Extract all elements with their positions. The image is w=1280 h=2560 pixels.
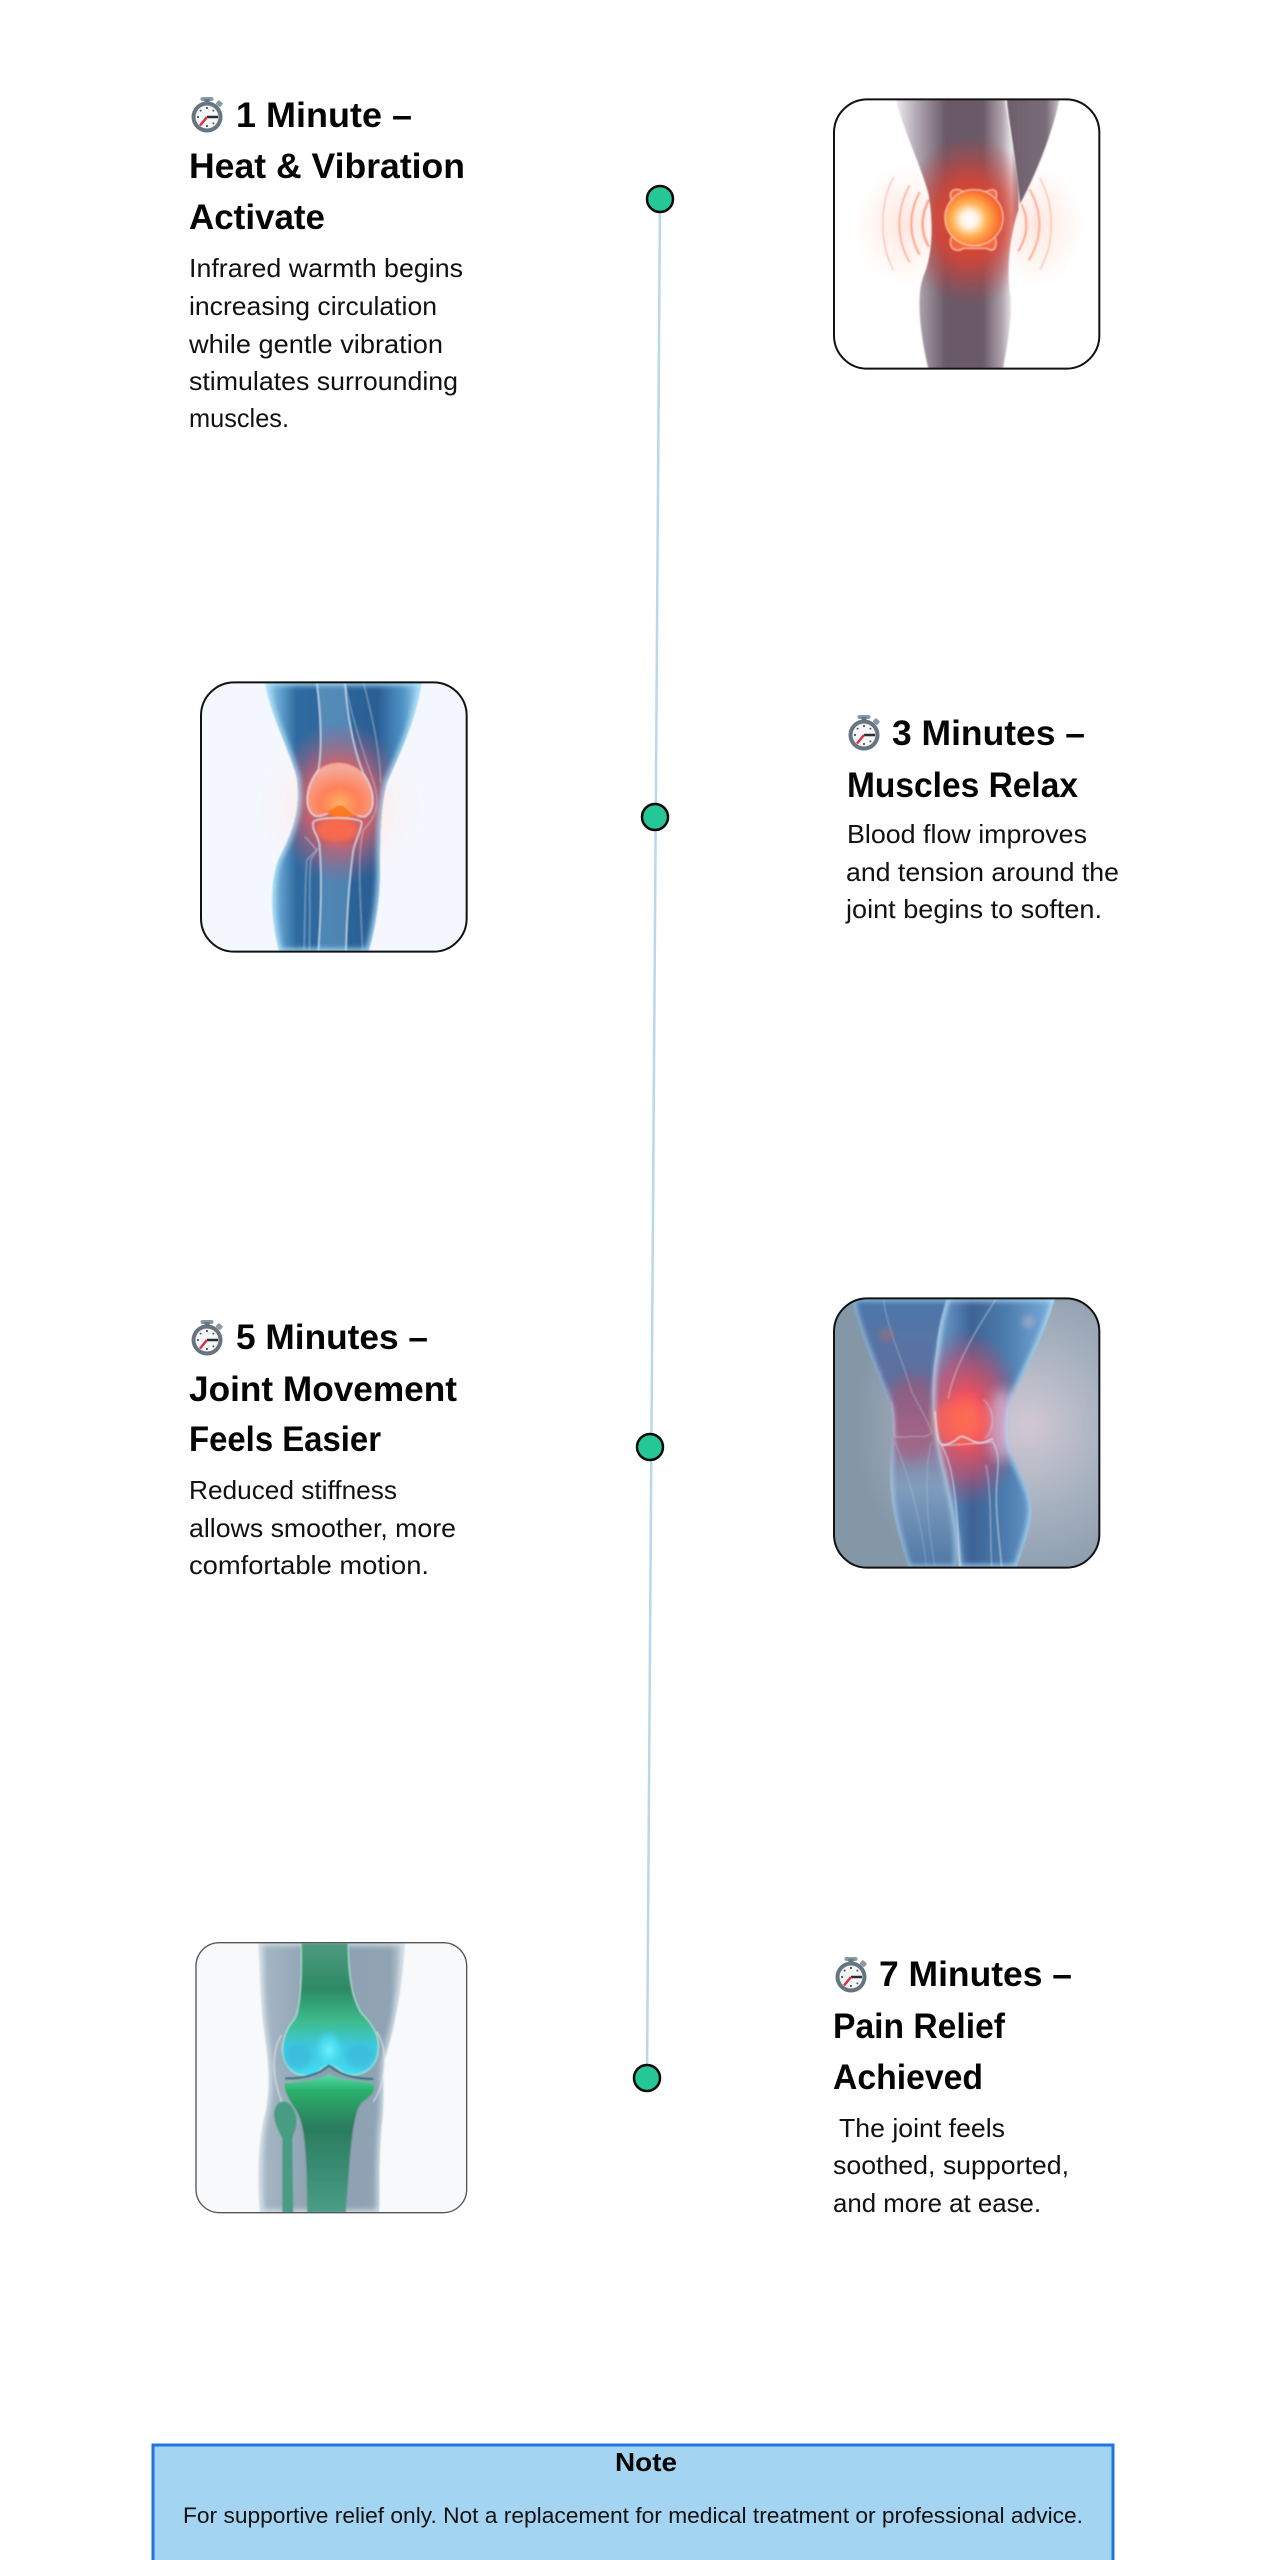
- body text: [845, 819, 1119, 924]
- note text: For supportive relief only. Not a replacement for medical treatment or professional advice.: [183, 2503, 1083, 2528]
- note heading: Note: [615, 2447, 677, 2477]
- body text: [189, 1475, 456, 1580]
- body text: Reduced stiffness: [189, 1475, 397, 1505]
- step 3: knee image with two legs: [834, 1298, 1099, 1568]
- heading: 1 Minute: Heat & Vibration: [189, 147, 465, 186]
- icon: stopwatch: [192, 97, 223, 132]
- heading: 7 Minutes: 7 Minutes –: [879, 1955, 1072, 1994]
- icon: stopwatch: [848, 715, 880, 750]
- body text: [188, 253, 463, 433]
- marker dot 2: [642, 804, 668, 830]
- heading: 3 Minutes: 3 Minutes –: [892, 714, 1085, 753]
- body text: soothed, supported,: [833, 2150, 1069, 2180]
- body text: joint begins to soften.: [845, 894, 1102, 924]
- heading: 5 Minutes: Feels Easier: [189, 1420, 381, 1459]
- marker dot 3: [637, 1434, 663, 1460]
- note panel: [153, 2445, 1113, 2560]
- step 2: knee image with blue leg: [201, 682, 467, 952]
- heading: 5 Minutes: 5 Minutes –: [236, 1318, 428, 1357]
- timeline line: [647, 199, 660, 2078]
- step 4: text block: [833, 1955, 1072, 2218]
- body text: and more at ease.: [833, 2188, 1041, 2218]
- body text: Blood flow improves: [847, 819, 1087, 849]
- body text: [833, 2113, 1069, 2218]
- step 1: text block: [188, 96, 465, 433]
- body text: stimulates surrounding: [189, 366, 458, 396]
- body text: Infrared warmth begins: [189, 253, 463, 283]
- step 2: text block: [845, 714, 1119, 924]
- heading: 7 Minutes: [833, 1955, 1072, 2097]
- heading: 7 Minutes: Achieved: [833, 2058, 983, 2097]
- marker dot 4: [634, 2065, 660, 2091]
- step 1: knee image with heat waves: [834, 99, 1099, 369]
- body text: The joint feels: [839, 2113, 1005, 2143]
- body text: comfortable motion.: [189, 1550, 429, 1580]
- heading: 3 Minutes: [847, 714, 1085, 805]
- heading: 5 Minutes: [189, 1318, 457, 1459]
- heading: 1 Minute: [189, 96, 465, 237]
- icon: stopwatch: [836, 1957, 867, 1992]
- heading: 7 Minutes: Pain Relief: [833, 2007, 1005, 2046]
- step 3: text block: [189, 1318, 457, 1580]
- step 4: knee image with green bones: [196, 1943, 467, 2213]
- body text: muscles.: [189, 403, 289, 433]
- icon: stopwatch: [192, 1320, 223, 1356]
- heading: 3 Minutes: Muscles Relax: [847, 766, 1079, 805]
- heading: 5 Minutes: Joint Movement: [189, 1370, 457, 1409]
- body text: and tension around the: [846, 857, 1119, 887]
- body text: while gentle vibration: [188, 329, 443, 359]
- heading: 1 Minute: Activate: [189, 198, 325, 237]
- marker dot 1: [647, 186, 673, 212]
- body text: increasing circulation: [189, 291, 437, 321]
- heading: 1 Minute: 1 Minute –: [236, 96, 412, 135]
- body text: allows smoother, more: [189, 1513, 456, 1543]
